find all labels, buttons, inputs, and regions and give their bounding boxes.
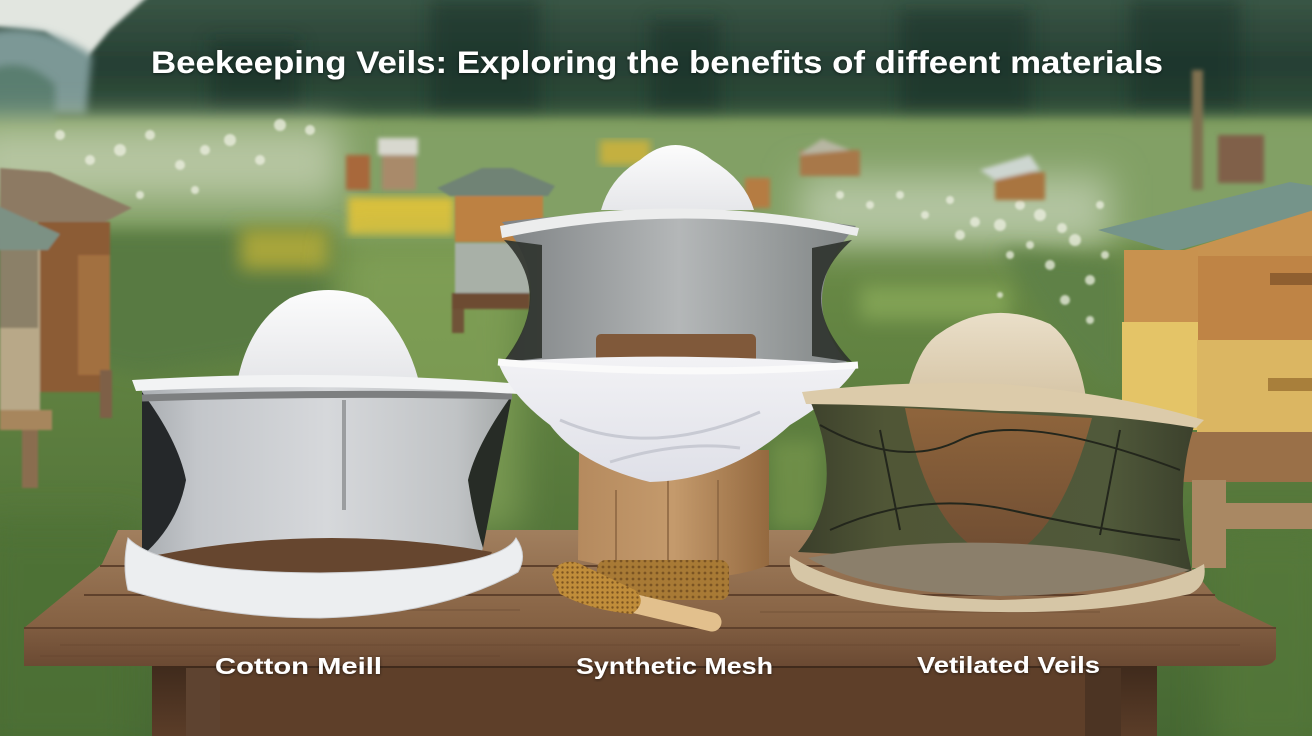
hoop base (125, 538, 523, 618)
wide brim (132, 375, 522, 394)
veil: synthetic mesh (498, 145, 859, 482)
tan cap (908, 313, 1086, 398)
wooden block (596, 334, 756, 376)
roller (597, 560, 729, 600)
netting cylinder (142, 385, 512, 556)
mesh body (502, 212, 856, 368)
background beehives: distant row (346, 70, 1264, 208)
veil: cotton mesh (125, 290, 523, 618)
label: ventilated: Vetilated Veils (917, 652, 1100, 678)
centre stump stand (578, 450, 769, 578)
honeycomb tools (552, 560, 729, 622)
table base (152, 665, 1157, 736)
background beehive: far centre (437, 168, 555, 333)
title: Beekeeping Veils: Exploring the benefits of diffeent materials (151, 44, 1163, 80)
beehive stack at right edge (1098, 182, 1312, 568)
brush (552, 562, 712, 622)
inner table shadow (152, 538, 492, 574)
wooden table (24, 530, 1276, 736)
round cap (238, 290, 418, 378)
upper rim (500, 208, 859, 238)
inner base (808, 543, 1190, 596)
inner brown panel (905, 408, 1092, 560)
lower hoop (790, 556, 1205, 612)
white meadow flowers (55, 119, 1109, 324)
wide tan brim (802, 383, 1204, 428)
white fabric skirt (498, 357, 858, 482)
veil: ventilated hat (790, 313, 1205, 612)
beehive stacks at left edge (0, 168, 132, 488)
table top (24, 530, 1276, 666)
dark netting (798, 396, 1196, 572)
label: cotton: Cotton Meill (215, 653, 382, 679)
label: synthetic: Synthetic Mesh (576, 653, 773, 679)
hat cap (601, 145, 754, 210)
